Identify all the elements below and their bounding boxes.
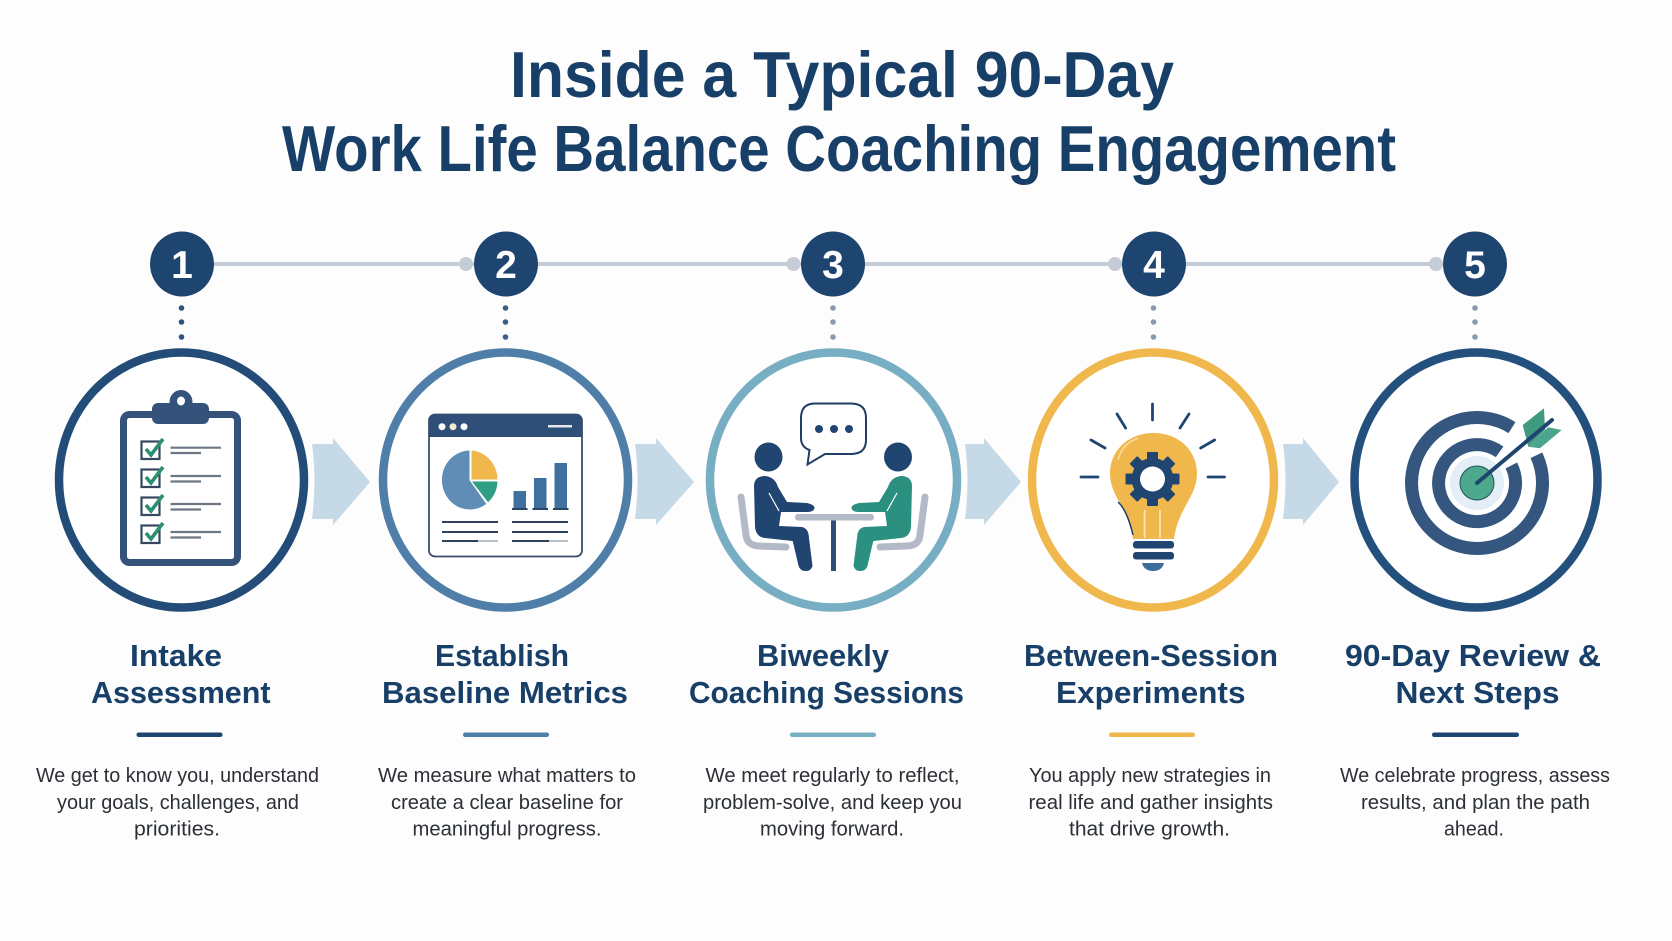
step 4 description: You apply new strategies in [1029,764,1271,787]
step 5 description: We celebrate progress, assess [1340,764,1610,787]
icon: clipboard [124,390,238,562]
step 3 rule [790,732,876,737]
icon: gear [1126,452,1180,506]
panel: step 5 circle with target icon [1354,352,1598,608]
step 3 number badge: 3 [822,244,844,287]
panel: step 4 circle with lightbulb icon [1032,352,1274,608]
step 1 description [36,764,319,840]
step 3 heading: Coaching Sessions [689,675,964,710]
step 4 description: that drive growth. [1069,818,1230,840]
step 4 number badge [1122,232,1186,296]
step 2 number badge [474,232,538,296]
dotted links from badges to circles [179,305,1478,340]
icon: light rays [1081,404,1224,477]
icon: target [1412,408,1562,548]
icon: arrow in target [1477,408,1562,483]
timeline connector [214,257,1443,271]
icon: left person [754,442,815,571]
icon: speech bubble [801,404,866,464]
pie chart [441,450,498,510]
title: Inside a Typical 90-Day [510,38,1174,111]
step 5 description: ahead. [1444,818,1504,840]
step 2 description: We measure what matters to [378,764,636,787]
step 2 description: meaningful progress. [412,818,602,840]
step 2 description [378,764,636,840]
step 3 description: moving forward. [760,818,904,840]
step 4 heading: Between-Session [1024,638,1278,673]
step 3 description: problem-solve, and keep you [703,791,962,814]
step 1 heading [91,638,270,710]
step 5 rule [1432,732,1519,737]
step 3 description: We meet regularly to reflect, [706,764,960,787]
step 1 rule [136,732,222,737]
step 4 heading [1024,638,1278,710]
step 1 description: priorities. [134,818,220,840]
panel: step 3 circle with coaching conversation icon [710,352,957,608]
step 5 description [1340,764,1610,840]
step 1 heading: Intake [130,638,222,673]
step 1 heading: Assessment [91,675,270,710]
step 1 number badge [150,232,214,296]
step 1 description: We get to know you, understand [36,764,319,787]
step 4 number badge: 4 [1143,244,1165,287]
icon: table [795,514,874,571]
bar chart [512,463,568,510]
step 4 rule [1109,732,1195,737]
icon: chairs [741,497,925,547]
panel: step 2 circle with dashboard icon [383,352,628,608]
step 2 heading: Establish [435,638,569,673]
step 2 heading: Baseline Metrics [382,675,628,710]
step 4 description: real life and gather insights [1028,791,1273,814]
icon: lightbulb [1110,433,1197,571]
step 5 number badge: 5 [1464,244,1486,287]
icon: analytics dashboard [429,414,582,556]
title [282,38,1396,185]
step 2 description: create a clear baseline for [391,791,623,814]
arrow: step 1 to 2 [312,438,370,525]
step 2 number badge: 2 [495,244,517,287]
step 2 heading [382,638,628,710]
step 4 heading: Experiments [1056,675,1246,710]
step 4 description [1028,764,1273,840]
arrow: step 4 to 5 [1283,438,1339,525]
arrow: step 2 to 3 [635,438,694,525]
step 5 heading: 90-Day Review & [1345,638,1601,673]
step 5 description: results, and plan the path [1361,791,1590,814]
step 3 heading [689,638,964,710]
step 1 description: your goals, challenges, and [57,791,299,814]
title: Work Life Balance Coaching Engagement [282,112,1396,185]
step 3 number badge [801,232,865,296]
step 5 number badge [1443,232,1507,296]
panel: step 1 circle with clipboard icon [59,352,304,608]
step 2 rule [463,732,549,737]
step 3 description [703,764,962,840]
arrow: step 3 to 4 [965,438,1021,525]
step 5 heading: Next Steps [1396,675,1560,710]
icon: right person [851,442,912,571]
step 3 heading: Biweekly [757,638,890,673]
step 5 heading [1345,638,1601,710]
step 1 number badge: 1 [171,244,193,287]
